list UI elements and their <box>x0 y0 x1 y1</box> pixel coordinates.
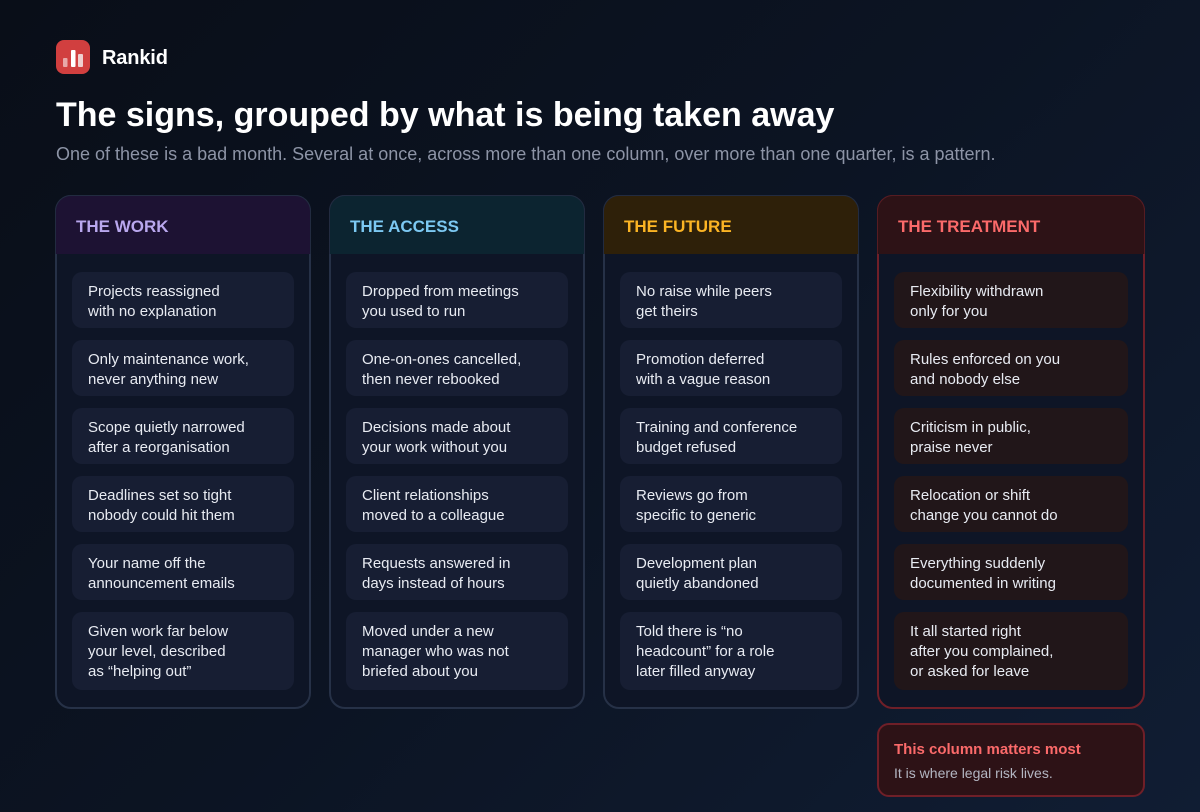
panel: the work <box>55 195 311 709</box>
item: briefed about you <box>362 663 478 680</box>
item: announcement emails <box>88 575 235 592</box>
panel: the future <box>603 195 859 709</box>
item: It all started right <box>910 623 1021 640</box>
item: with a vague reason <box>636 371 770 388</box>
item: only for you <box>910 303 988 320</box>
heading: the future: THE FUTURE <box>624 217 732 236</box>
item: Deadlines set so tight <box>88 487 231 504</box>
item <box>72 476 294 532</box>
item: headcount” for a role <box>636 643 774 660</box>
item: Criticism in public, <box>910 419 1031 436</box>
heading: the future <box>603 195 859 254</box>
item: your level, described <box>88 643 226 660</box>
item: Projects reassigned <box>88 283 220 300</box>
heading: the work: THE WORK <box>76 217 169 236</box>
item <box>346 408 568 464</box>
heading: the treatment <box>877 195 1145 254</box>
item: specific to generic <box>636 507 756 524</box>
heading: the access: THE ACCESS <box>350 217 459 236</box>
item <box>894 408 1128 464</box>
heading: the treatment: THE TREATMENT <box>898 217 1040 236</box>
item: you used to run <box>362 303 465 320</box>
heading: the access <box>329 195 585 254</box>
item: Only maintenance work, <box>88 351 249 368</box>
item <box>72 612 294 690</box>
panel: the treatment <box>877 195 1145 709</box>
panel: the access <box>329 195 585 709</box>
item: Your name off the <box>88 555 206 572</box>
item: Relocation or shift <box>910 487 1030 504</box>
item: moved to a colleague <box>362 507 505 524</box>
item <box>620 272 842 328</box>
item <box>72 340 294 396</box>
item <box>894 612 1128 690</box>
item: Development plan <box>636 555 757 572</box>
item: budget refused <box>636 439 736 456</box>
heading: the work <box>55 195 311 254</box>
item <box>346 272 568 328</box>
item: Dropped from meetings <box>362 283 519 300</box>
item <box>72 544 294 600</box>
item: get theirs <box>636 303 698 320</box>
item: Everything suddenly <box>910 555 1045 572</box>
callout text: It is where legal risk lives. <box>894 765 1053 781</box>
item: or asked for leave <box>910 663 1029 680</box>
item: never anything new <box>88 371 218 388</box>
item <box>894 544 1128 600</box>
item: as “helping out” <box>88 663 191 680</box>
item <box>346 476 568 532</box>
item <box>346 612 568 690</box>
item <box>620 340 842 396</box>
item <box>72 272 294 328</box>
item: praise never <box>910 439 993 456</box>
item: documented in writing <box>910 575 1056 592</box>
item: manager who was not <box>362 643 509 660</box>
item: after you complained, <box>910 643 1053 660</box>
brand name: Rankid <box>102 47 168 69</box>
item <box>72 408 294 464</box>
item: Training and conference <box>636 419 797 436</box>
item: Rules enforced on you <box>910 351 1060 368</box>
logo mark <box>56 40 90 74</box>
title: The signs, grouped by what is being taken away <box>56 96 834 134</box>
item: quietly abandoned <box>636 575 759 592</box>
item <box>620 476 842 532</box>
item <box>620 612 842 690</box>
item: Scope quietly narrowed <box>88 419 245 436</box>
item: Decisions made about <box>362 419 510 436</box>
callout <box>877 723 1145 797</box>
item: then never rebooked <box>362 371 500 388</box>
item: and nobody else <box>910 371 1020 388</box>
item: Promotion deferred <box>636 351 764 368</box>
item: Flexibility withdrawn <box>910 283 1043 300</box>
item: days instead of hours <box>362 575 505 592</box>
item: Client relationships <box>362 487 489 504</box>
item: nobody could hit them <box>88 507 235 524</box>
subtitle: One of these is a bad month. Several at once, across more than one column, over more than one quarter, is a pattern. <box>56 144 996 164</box>
item: with no explanation <box>88 303 216 320</box>
item <box>346 544 568 600</box>
item: One-on-ones cancelled, <box>362 351 521 368</box>
item: Reviews go from <box>636 487 748 504</box>
item: change you cannot do <box>910 507 1058 524</box>
item: Requests answered in <box>362 555 510 572</box>
item <box>620 408 842 464</box>
item <box>894 272 1128 328</box>
item: Given work far below <box>88 623 228 640</box>
item: your work without you <box>362 439 507 456</box>
item: Moved under a new <box>362 623 494 640</box>
item: after a reorganisation <box>88 439 230 456</box>
item <box>894 340 1128 396</box>
callout heading: This column matters most <box>894 741 1081 758</box>
item: No raise while peers <box>636 283 772 300</box>
item <box>620 544 842 600</box>
item <box>894 476 1128 532</box>
item <box>346 340 568 396</box>
item: Told there is “no <box>636 623 743 640</box>
item: later filled anyway <box>636 663 755 680</box>
